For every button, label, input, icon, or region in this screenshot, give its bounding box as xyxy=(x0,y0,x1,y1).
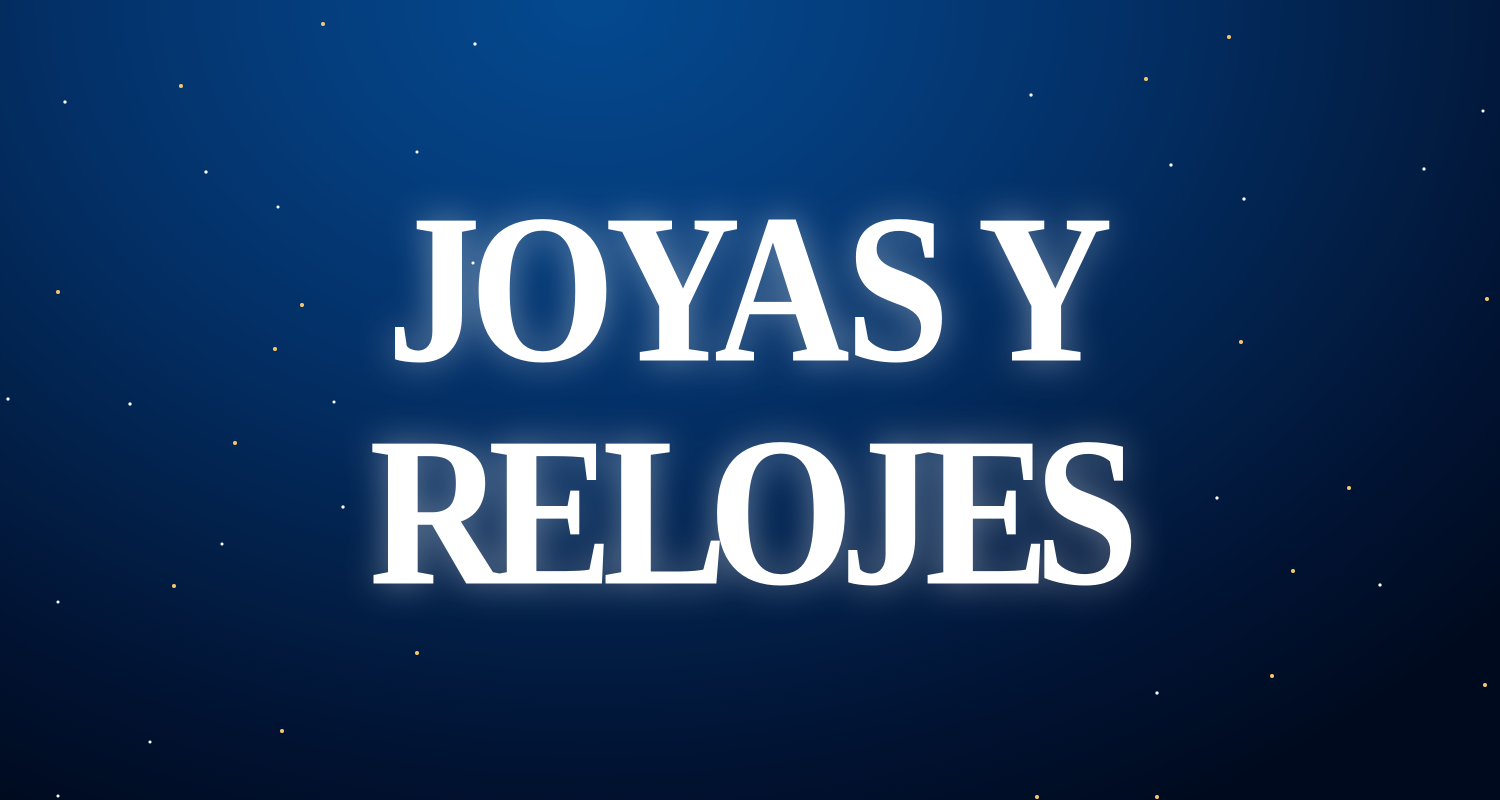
title: JOYAS Y RELOJES: JOYAS Y xyxy=(387,172,1112,407)
title: JOYAS Y RELOJES xyxy=(370,172,1139,630)
title: JOYAS Y RELOJES: RELOJES xyxy=(370,395,1139,630)
